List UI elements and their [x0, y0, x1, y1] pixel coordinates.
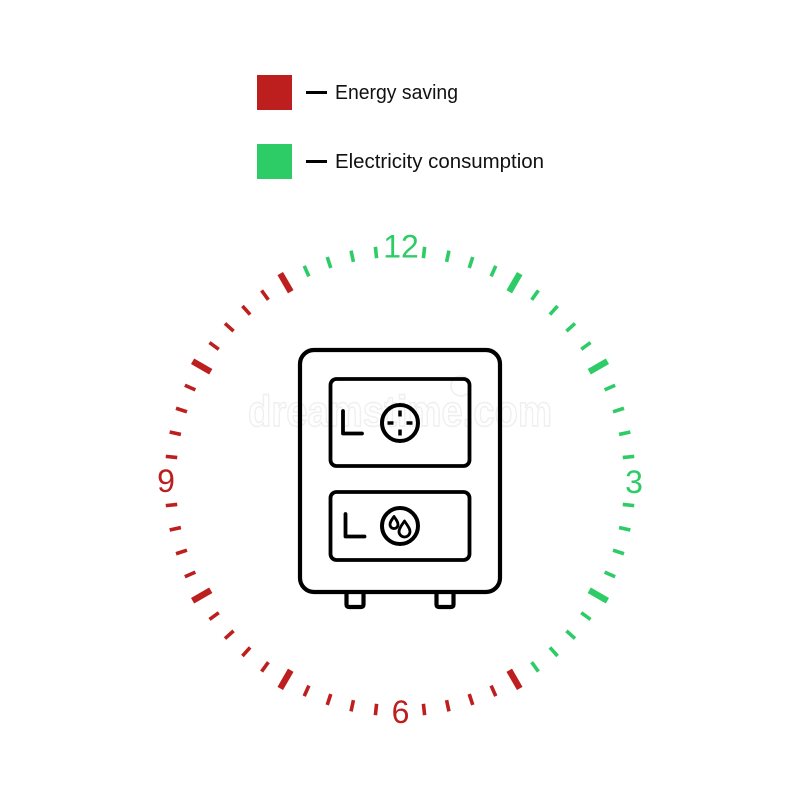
- clock dial: red ticks (energy saving): [166, 272, 523, 715]
- icon: heating dial: [382, 405, 418, 441]
- clock numerals: 6: [392, 694, 409, 730]
- legend item: electricity consumption: [257, 144, 544, 179]
- clock numerals: 3: [625, 464, 643, 500]
- clock numerals: 9: [157, 463, 175, 499]
- legend item: energy saving: [257, 75, 458, 110]
- boiler body: [300, 350, 500, 592]
- boiler feet: [346, 593, 454, 607]
- icon: water drops: [382, 508, 418, 544]
- clock dial: green ticks (electricity consumption): [303, 247, 634, 673]
- icon: boiler: [300, 350, 500, 607]
- upper panel: [330, 379, 470, 466]
- legend: [257, 75, 544, 179]
- clock numerals: [157, 228, 643, 730]
- clock numerals: 12: [383, 228, 419, 264]
- lower panel: [330, 492, 470, 560]
- legend item: energy saving: Energy saving: [335, 82, 458, 104]
- watermark: dreamstime.com: [248, 387, 552, 436]
- legend item: electricity consumption: Electricity consumption: [335, 151, 544, 173]
